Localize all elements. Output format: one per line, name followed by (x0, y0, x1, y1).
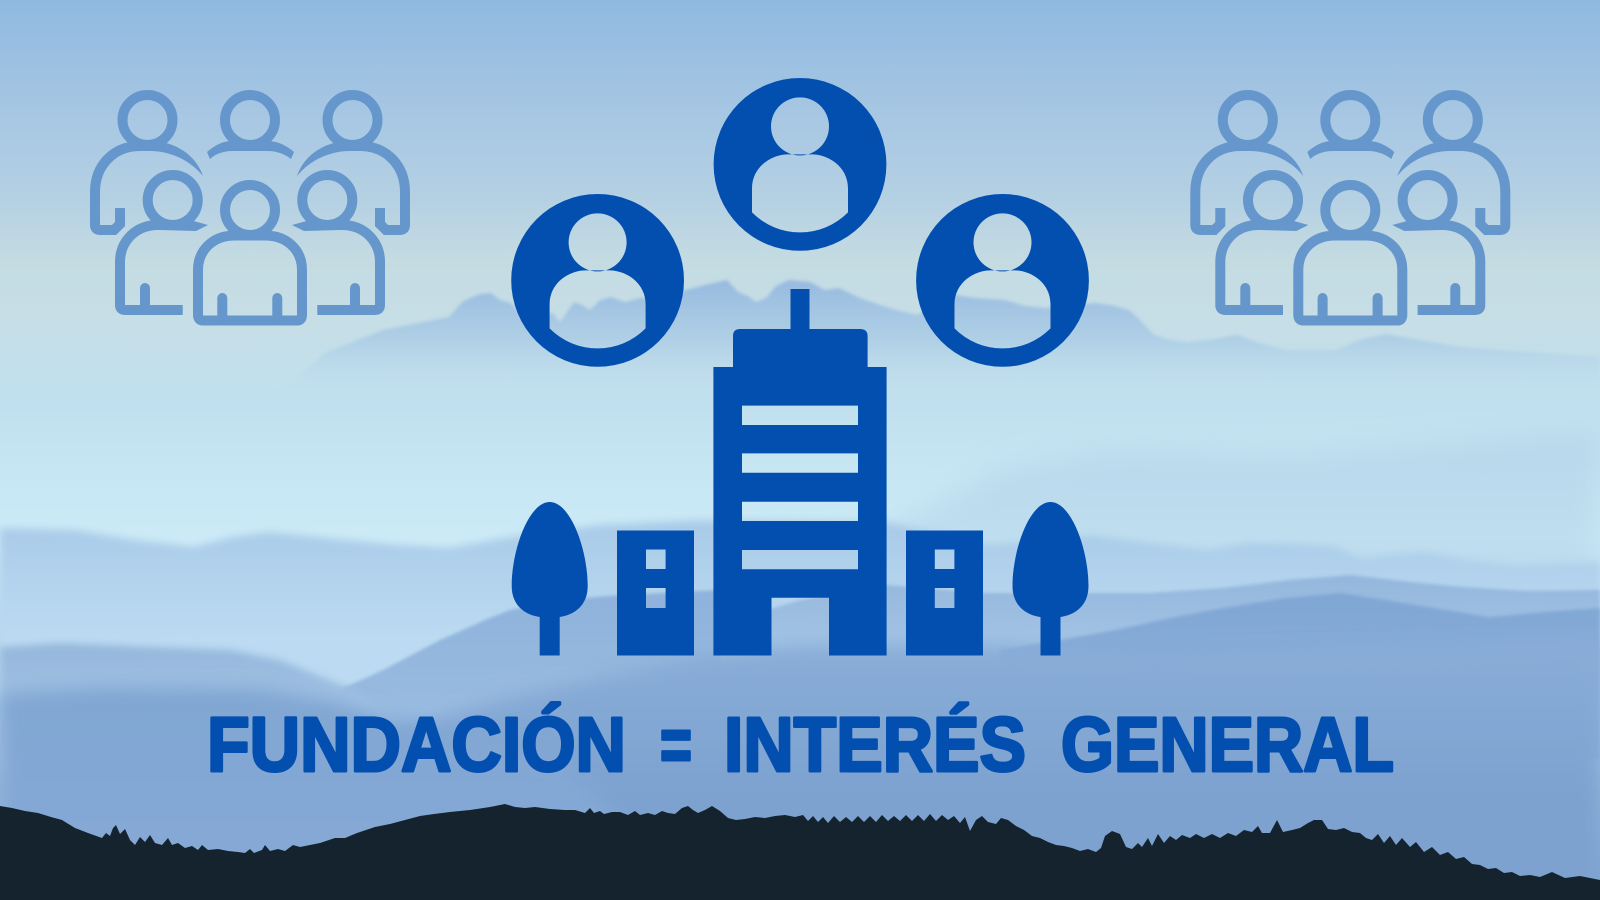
title: Fundación = Interés General: = (660, 702, 692, 788)
title: Fundación = Interés General: GENERAL (1061, 702, 1394, 788)
icon: right tree (1012, 502, 1088, 656)
front left body (120, 220, 208, 310)
back right body (297, 141, 405, 230)
icon: top person in circle (714, 78, 886, 251)
left hill layer (0, 643, 420, 770)
front centre body (198, 236, 302, 320)
title: Fundación = Interés General: INTERÉS (724, 702, 1026, 788)
title: Fundación = Interés General: FUNDACIÓN (207, 702, 626, 788)
middle hill layer (500, 575, 1600, 760)
title: Fundación = Interés General (207, 702, 1394, 788)
icon: left person in circle (511, 194, 684, 367)
faint far hills on the right (820, 430, 1600, 590)
icon: left small building (617, 530, 694, 656)
icon: right person in circle (916, 194, 1089, 367)
icon: central office tower (713, 289, 887, 656)
back left body (95, 141, 203, 230)
front right body (292, 220, 380, 310)
back middle shoulders (207, 141, 294, 159)
lower valley haze (300, 640, 1600, 900)
icon: right small building (906, 530, 983, 656)
back row heads (122, 95, 378, 145)
dark forested ridge silhouette (0, 804, 1600, 900)
distant hill layer (0, 520, 1600, 700)
icon: left group of six outlined people (95, 95, 405, 320)
near left hill layer (0, 687, 700, 900)
nearer hill layer, right side (1000, 593, 1600, 760)
icon: left tree (512, 502, 588, 656)
far jagged mountain range (250, 280, 1600, 420)
front row heads (148, 175, 352, 235)
central left ridge (300, 590, 720, 760)
icon: right group of six outlined people (1195, 95, 1505, 320)
